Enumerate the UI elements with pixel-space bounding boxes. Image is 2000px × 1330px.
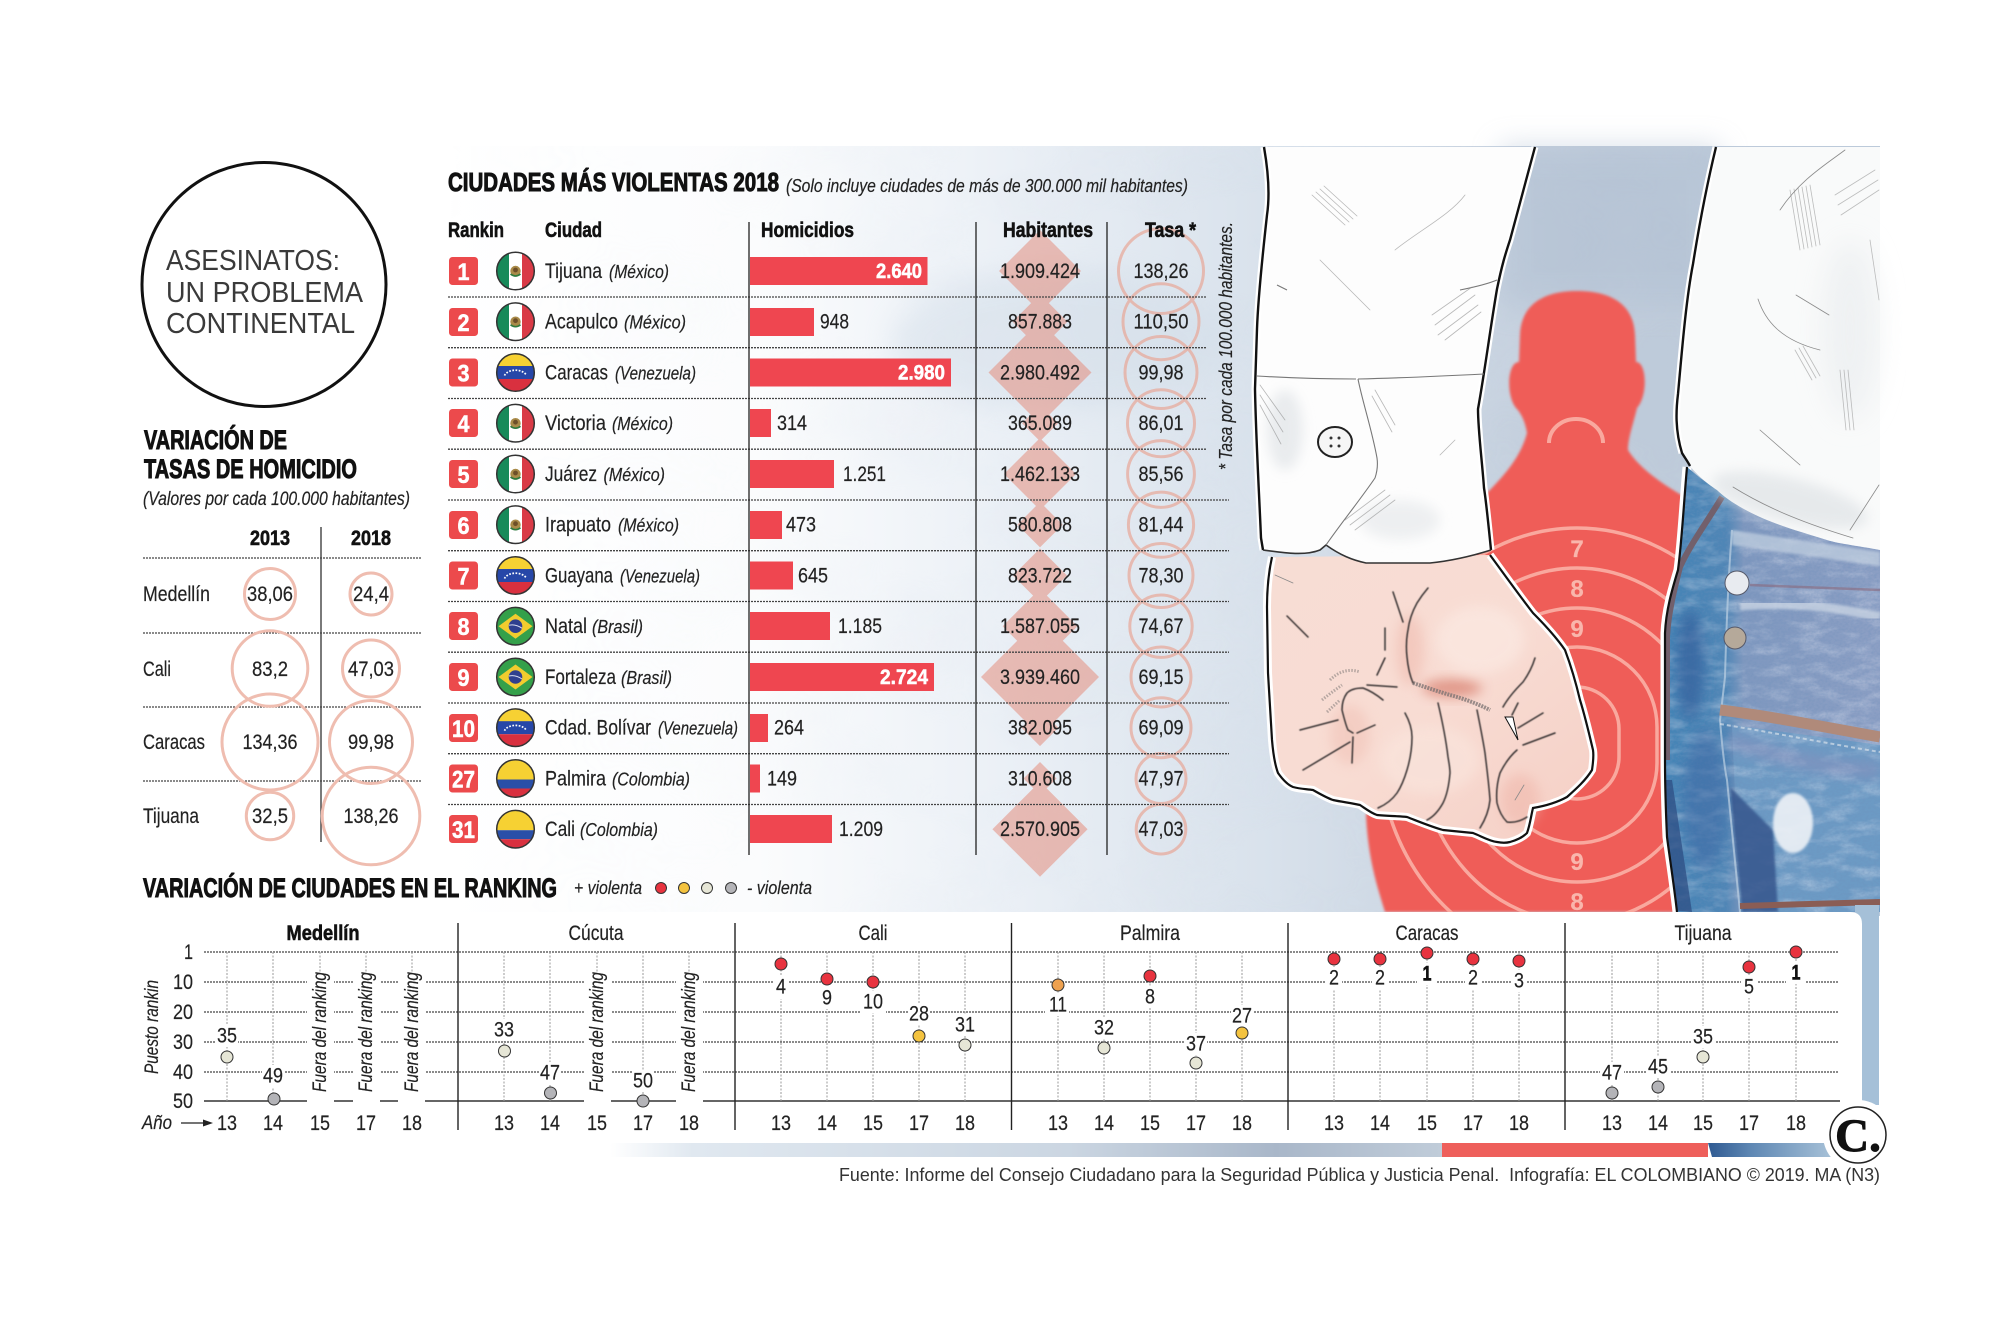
rank badges: 4	[458, 411, 470, 438]
ranking point values: 31	[955, 1012, 975, 1036]
year labels: 14	[263, 1111, 283, 1135]
city names: (Brasil)	[592, 616, 643, 637]
year labels: 17	[356, 1111, 376, 1135]
rate values: 81,44	[1138, 512, 1184, 536]
y axis labels: 40	[173, 1060, 193, 1084]
year labels: 14	[1370, 1111, 1390, 1135]
year labels: 17	[909, 1111, 929, 1135]
y axis labels: 30	[173, 1030, 193, 1054]
source footer: Fuente: Informe del Consejo Ciudadano para la Seguridad Pública y Justicia Penal. Infografía: EL COLOMBIANO © 2019. MA (N3)	[839, 1164, 1880, 1185]
logo: El Colombiano: C.	[1835, 1110, 1881, 1162]
rate values: 138,26	[1134, 259, 1189, 283]
row dividers	[448, 222, 1229, 855]
panel names: Palmira	[1120, 921, 1180, 945]
rate values: 74,67	[1138, 614, 1184, 638]
population values: 1.909.424	[1000, 259, 1080, 283]
rank badges: 8	[458, 614, 470, 641]
out of ranking labels: Fuera del ranking	[356, 972, 377, 1092]
rate values: 99,98	[1138, 360, 1184, 384]
panel: variation of homicide rates	[143, 424, 422, 865]
illustration: shooting target silhouette: 8	[1570, 889, 1584, 916]
ranking point values: 2	[1468, 966, 1478, 990]
table: rates by city: Caracas	[143, 730, 205, 754]
table: rates by city: 83,2	[252, 657, 288, 681]
ranking point values	[217, 960, 1801, 1092]
city names: Juárez	[545, 463, 597, 486]
ranking point values: 8	[1145, 984, 1155, 1008]
heading: most violent cities: CIUDADES MÁS VIOLENTAS 2018	[448, 167, 779, 197]
ranking point values: 47	[540, 1060, 560, 1084]
year labels: 18	[1509, 1111, 1529, 1135]
panel: right denim strip	[1855, 905, 1879, 1105]
panel names: Tijuana	[1674, 921, 1732, 945]
population values: 1.587.055	[1000, 614, 1080, 638]
illustration: right shirt torso	[1677, 147, 1880, 550]
city names: (México)	[624, 312, 686, 332]
column headers: Rankin	[448, 218, 504, 242]
column headers: Ciudad	[545, 218, 602, 242]
year labels: 14	[1648, 1111, 1668, 1135]
rate values: 69,15	[1138, 665, 1184, 689]
rate values: 85,56	[1138, 462, 1184, 486]
ranking point values: 45	[1648, 1054, 1668, 1078]
legend: + violenta	[574, 877, 642, 898]
illustration: shooting target silhouette	[1364, 289, 1680, 912]
city names: Fortaleza	[545, 666, 616, 689]
city names: Victoria	[545, 412, 606, 435]
ranking point values: 1	[1792, 960, 1801, 984]
table: rates by city: Tijuana	[143, 804, 199, 828]
city names: Natal	[545, 615, 587, 638]
illustration: clenched fist	[1267, 555, 1593, 843]
population values: 580.808	[1008, 512, 1072, 536]
rate values: 69,09	[1138, 716, 1184, 740]
year labels: 17	[1739, 1111, 1759, 1135]
illustration: shooting target silhouette: 9	[1570, 616, 1584, 643]
ranking point values: 37	[1186, 1032, 1206, 1056]
year labels: 15	[1417, 1111, 1437, 1135]
homicide values: 264	[774, 716, 804, 740]
year labels: 13	[494, 1111, 514, 1135]
year labels: 18	[402, 1111, 422, 1135]
population values: 2.570.905	[1000, 817, 1080, 841]
out of ranking labels: Fuera del ranking	[402, 972, 423, 1092]
legend	[574, 877, 812, 898]
year labels: 15	[587, 1111, 607, 1135]
year labels: 13	[1048, 1111, 1068, 1135]
rank badges: 9	[458, 665, 470, 692]
year labels: 13	[217, 1111, 237, 1135]
population values: 382.095	[1008, 716, 1072, 740]
panel names: Cali	[858, 921, 888, 945]
ranking point values: 49	[263, 1064, 283, 1088]
table: rates by city	[143, 527, 422, 865]
column headers: Homicidios	[761, 218, 854, 242]
year labels: 15	[1693, 1111, 1713, 1135]
city names: Tijuana	[545, 260, 602, 283]
homicide values: 314	[777, 411, 807, 435]
icon: cuff button	[1318, 427, 1352, 457]
year labels: 15	[1140, 1111, 1160, 1135]
population values	[1000, 259, 1080, 841]
ranking point values: 2	[1329, 966, 1339, 990]
population diamonds	[981, 230, 1099, 877]
panel names: Caracas	[1396, 921, 1458, 945]
ranking dots	[221, 946, 1802, 1107]
city names: (México)	[612, 413, 673, 434]
ranking point values: 4	[776, 974, 786, 998]
city names: (México)	[609, 261, 669, 282]
rank badges: 6	[458, 513, 470, 540]
homicide values: 149	[767, 766, 797, 790]
homicide bars	[750, 257, 951, 843]
subtitle: most violent cities: (Solo incluye ciudades de más de 300.000 mil habitantes)	[786, 175, 1188, 196]
rate values: 78,30	[1138, 564, 1184, 588]
illustration: jeans	[1660, 460, 1880, 915]
out of ranking labels	[310, 972, 700, 1092]
column headers: Habitantes	[1003, 218, 1093, 242]
year labels: 18	[1786, 1111, 1806, 1135]
ranking point values: 47	[1602, 1060, 1622, 1084]
logo: El Colombiano	[1823, 1100, 1893, 1170]
country flags	[496, 252, 535, 849]
year labels: 15	[310, 1111, 330, 1135]
panel names: Cúcuta	[568, 921, 624, 945]
rate values	[1134, 259, 1189, 841]
heading: variation of rates: VARIACIÓN DE	[144, 424, 287, 455]
city names: (Venezuela)	[620, 566, 700, 586]
ranking point values: 27	[1232, 1004, 1252, 1028]
ranking point values: 33	[494, 1018, 514, 1042]
homicide values	[767, 259, 945, 841]
table: rates by city: Medellín	[143, 582, 210, 606]
panel: ranking chart white card	[0, 912, 1862, 1143]
city names: (México)	[618, 514, 679, 536]
homicide values: 1.251	[843, 462, 886, 486]
city names: Palmira	[545, 768, 606, 790]
city names: Cali	[545, 818, 575, 841]
table: rates by city: 47,03	[348, 657, 394, 681]
illustration: shooting target silhouette: 7	[1570, 536, 1584, 563]
rank badges: 1	[458, 259, 470, 286]
rate values: 110,50	[1134, 310, 1189, 334]
table: rates by city: 2013	[250, 527, 290, 550]
city names: (Venezuela)	[615, 362, 696, 384]
column headers: Tasa *	[1145, 218, 1197, 242]
year labels: 17	[1186, 1111, 1206, 1135]
ranking point values: 1	[1422, 962, 1432, 986]
ranking point values: 11	[1049, 992, 1067, 1016]
year labels: 14	[540, 1111, 560, 1135]
year labels: 18	[1232, 1111, 1252, 1135]
city names: Cdad. Bolívar	[545, 716, 651, 740]
table: rates by city: Cali	[143, 657, 171, 681]
homicide values: 2.724	[880, 665, 928, 689]
homicide values: 1.185	[838, 614, 882, 638]
ranking point values: 3	[1514, 968, 1524, 992]
y axis labels: 20	[173, 1000, 193, 1024]
homicide values: 948	[820, 310, 849, 334]
panel: bottom illustration strip	[610, 1143, 1833, 1157]
column headers	[448, 218, 1197, 242]
population values: 310.608	[1008, 766, 1072, 790]
homicide values: 2.640	[876, 259, 922, 283]
city names: (Colombia)	[612, 768, 690, 790]
table: rates by city: 24,4	[353, 582, 389, 606]
rate values: 47,03	[1138, 817, 1184, 841]
year labels: 15	[863, 1111, 883, 1135]
ranking point values: 9	[822, 986, 832, 1010]
panel names: Medellín	[286, 921, 360, 945]
table: rates by city: 99,98	[348, 730, 394, 754]
city names	[545, 260, 738, 841]
headline text: UN PROBLEMA	[166, 277, 364, 309]
rate values: 86,01	[1138, 411, 1184, 435]
ranking point values: 5	[1744, 974, 1754, 998]
year labels: 14	[817, 1111, 837, 1135]
ranking point values: 10	[863, 990, 883, 1014]
ranking point values: 28	[909, 1002, 929, 1026]
rate values: 47,97	[1138, 766, 1184, 790]
headline text: ASESINATOS:	[166, 245, 340, 277]
illustration: shooting target silhouette: 8	[1570, 576, 1584, 603]
population values: 857.883	[1008, 310, 1072, 334]
panel: headline circle	[142, 162, 386, 406]
year labels	[217, 1111, 1806, 1135]
subtitle: variation of rates: (Valores por cada 100.000 habitantes)	[143, 489, 410, 510]
headline text: CONTINENTAL	[166, 308, 355, 340]
panel: most violent cities 2018	[448, 167, 1236, 877]
y axis labels: 1	[184, 940, 193, 964]
table: rates by city: 138,26	[344, 804, 399, 828]
rank badges: 10	[452, 716, 475, 743]
city names: (Brasil)	[621, 667, 672, 688]
out of ranking labels: Fuera del ranking	[587, 972, 608, 1092]
year labels: 17	[633, 1111, 653, 1135]
year labels: 17	[1463, 1111, 1483, 1135]
population values: 3.939.460	[1000, 665, 1080, 689]
rate circles	[1118, 228, 1204, 854]
rank badges: 7	[458, 564, 470, 590]
out of ranking labels: Fuera del ranking	[310, 972, 331, 1092]
rank badges	[449, 257, 478, 844]
ranking point values: 35	[217, 1024, 237, 1048]
out of ranking labels: Fuera del ranking	[679, 972, 700, 1092]
legend: - violenta	[747, 877, 812, 898]
rank badges: 2	[458, 310, 470, 337]
population values: 823.722	[1008, 564, 1072, 588]
heading: ranking variation: VARIACIÓN DE CIUDADES EN EL RANKING	[143, 872, 557, 903]
illustration: shooting target silhouette: 9	[1570, 849, 1584, 876]
city names: (Colombia)	[580, 819, 658, 840]
city names: (México)	[604, 464, 665, 485]
city names: Caracas	[545, 362, 608, 384]
y axis labels: 10	[173, 970, 193, 994]
panel: illustration background	[774, 134, 1880, 916]
table: rates by city: 2018	[351, 527, 391, 550]
city names: Acapulco	[545, 310, 618, 334]
rank badges: 5	[458, 462, 470, 489]
table: rates by city: 32,5	[252, 804, 288, 828]
rank badges: 27	[452, 766, 475, 794]
homicide values: 2.980	[898, 360, 945, 384]
rank badges: 3	[458, 360, 470, 388]
chart: ranking grid	[204, 923, 1840, 1130]
y axis labels: Año	[141, 1113, 172, 1134]
homicide values: 645	[798, 564, 828, 588]
panel: ranking variation	[141, 872, 1840, 1135]
ranking point values: 35	[1693, 1024, 1713, 1048]
city names: (Venezuela)	[658, 718, 738, 738]
y axis labels: 50	[173, 1089, 193, 1113]
homicide values: 473	[786, 512, 816, 536]
y axis labels: Puesto rankin	[142, 980, 163, 1074]
year labels: 18	[679, 1111, 699, 1135]
heading: variation of rates: TASAS DE HOMICIDIO	[144, 454, 357, 484]
city names: Guayana	[545, 564, 613, 588]
population values: 1.462.133	[1000, 462, 1080, 486]
ranking point values: 2	[1375, 966, 1385, 990]
table: rates by city: 38,06	[247, 582, 293, 606]
ranking point values: 32	[1094, 1016, 1114, 1040]
city names: Irapuato	[545, 514, 611, 536]
year labels: 13	[771, 1111, 791, 1135]
rate footnote: * Tasa por cada 100.000 habitantes.	[1215, 222, 1236, 470]
year labels: 14	[1094, 1111, 1114, 1135]
year labels: 13	[1602, 1111, 1622, 1135]
population values: 2.980.492	[1000, 360, 1080, 384]
panel names	[286, 921, 1732, 945]
heading: variation of rates	[144, 424, 357, 484]
year labels: 13	[1324, 1111, 1344, 1135]
ranking point values: 50	[633, 1068, 653, 1092]
table: rates by city: 134,36	[242, 730, 298, 754]
rank badges: 31	[452, 817, 475, 844]
population values: 365.089	[1008, 411, 1072, 435]
y axis labels	[141, 940, 213, 1134]
year labels: 18	[955, 1111, 975, 1135]
homicide values: 1.209	[839, 817, 883, 841]
headline text	[166, 245, 364, 340]
illustration: left shirt sleeve and cuff	[1255, 147, 1535, 563]
